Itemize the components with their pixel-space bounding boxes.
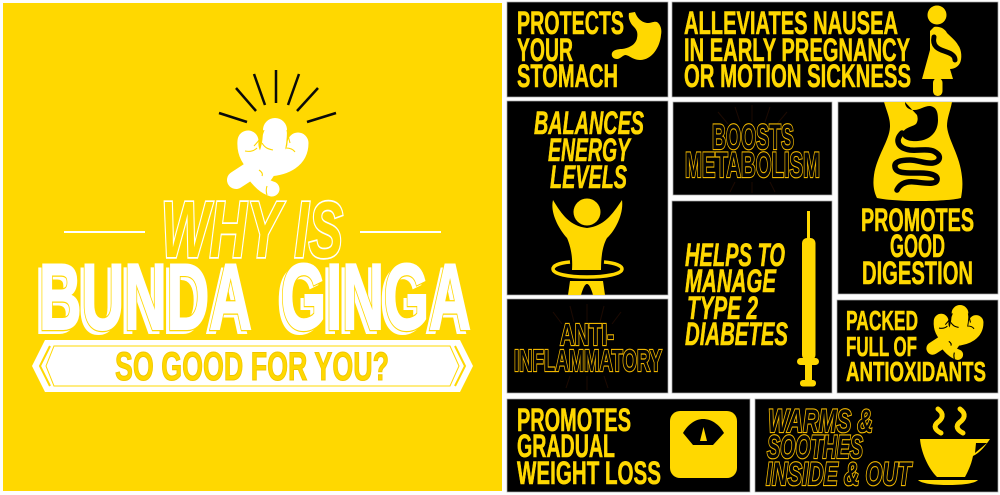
decorative faint rays: [553, 304, 621, 390]
panel: boosts metabolism: [673, 102, 832, 195]
left divider line: [64, 231, 145, 233]
panel: promotes gradual weight loss: [507, 399, 750, 492]
text: gradual weight loss: GRADUAL: [517, 428, 615, 464]
text: helps manage diabetes: [685, 237, 788, 352]
heading: bunda ginga: GINGA: [277, 248, 467, 353]
text: boosts metabolism: [685, 118, 820, 185]
panel: warms and soothes: [755, 399, 998, 492]
icon: torso with digestive tract: [873, 102, 962, 201]
panel: alleviates nausea: [672, 2, 998, 97]
text: protects your stomach: YOUR: [517, 32, 573, 68]
text: packed full of antioxidants: FULL OF: [846, 331, 917, 362]
text: packed full of antioxidants: [846, 305, 986, 387]
text: gradual weight loss: WEIGHT LOSS: [517, 455, 661, 491]
text: warms and soothes: SOOTHES: [767, 429, 863, 465]
icon: shine rays: [219, 70, 336, 122]
text: warms and soothes: WARMS &: [768, 403, 873, 439]
banner: so good for you: SO GOOD FOR YOU?: [115, 345, 389, 389]
panel: balances energy levels: [507, 101, 668, 295]
text: boosts metabolism: METABOLISM: [685, 146, 820, 185]
text: packed full of antioxidants: PACKED: [846, 305, 918, 336]
text: protects your stomach: STOMACH: [517, 58, 618, 94]
icon: white ginger root: [236, 130, 298, 195]
text: anti-inflammatory: ANTI-: [560, 317, 614, 352]
icon: bathroom scale: [670, 411, 737, 478]
text: helps manage diabetes: DIABETES: [685, 316, 788, 352]
text: anti-inflammatory: [514, 317, 662, 378]
panel: promotes good digestion: [838, 102, 998, 294]
text: boosts metabolism: BOOSTS: [712, 118, 794, 157]
icon: yellow ginger root: [933, 313, 976, 359]
text: balances energy levels: [534, 105, 644, 195]
text: warms and soothes: INSIDE & OUT: [766, 456, 913, 492]
text: balances energy levels: LEVELS: [550, 159, 627, 195]
icon: pregnant woman: [922, 6, 961, 96]
panel: protects your stomach: [507, 2, 668, 97]
heading: bunda ginga: GINGA: [281, 244, 471, 349]
text: promotes good digestion: GOOD: [890, 228, 945, 264]
heading: bunda ginga: BUNDA: [39, 244, 252, 349]
panel: hero title: [3, 3, 502, 491]
icon: person with hula hoop: [552, 198, 622, 295]
text: balances energy levels: ENERGY: [548, 132, 632, 168]
text: helps manage diabetes: TYPE 2: [687, 290, 758, 326]
icon: stomach: [612, 12, 661, 60]
text: protects your stomach: [517, 5, 624, 94]
text: promotes good digestion: [861, 202, 974, 291]
banner: so good for you: [32, 340, 473, 392]
text: warms and soothes: [766, 403, 913, 492]
heading: bunda ginga: GINGA: [281, 244, 471, 349]
heading: bunda ginga: BUNDA: [35, 248, 248, 353]
icon: syringe: [797, 211, 819, 386]
text: anti-inflammatory: INFLAMMATORY: [514, 343, 662, 378]
text: gradual weight loss: [517, 402, 661, 491]
text: helps manage diabetes: MANAGE: [685, 263, 777, 299]
panel: helps manage type 2 diabetes: [672, 201, 832, 393]
text: helps manage diabetes: HELPS TO: [685, 237, 785, 273]
text: balances energy levels: BALANCES: [534, 105, 644, 141]
text: protects your stomach: PROTECTS: [517, 5, 624, 41]
icon: steaming cup: [918, 409, 990, 485]
decorative faint rays: [718, 105, 787, 193]
panel: packed full of antioxidants: [837, 300, 998, 393]
heading: bunda ginga: BUNDA: [39, 244, 252, 349]
text: gradual weight loss: PROMOTES: [517, 402, 631, 438]
heading: why is: WHY IS: [161, 185, 343, 274]
panel: anti-inflammatory: [507, 299, 668, 393]
right divider line: [360, 231, 441, 233]
text: alleviates nausea: [684, 5, 911, 94]
